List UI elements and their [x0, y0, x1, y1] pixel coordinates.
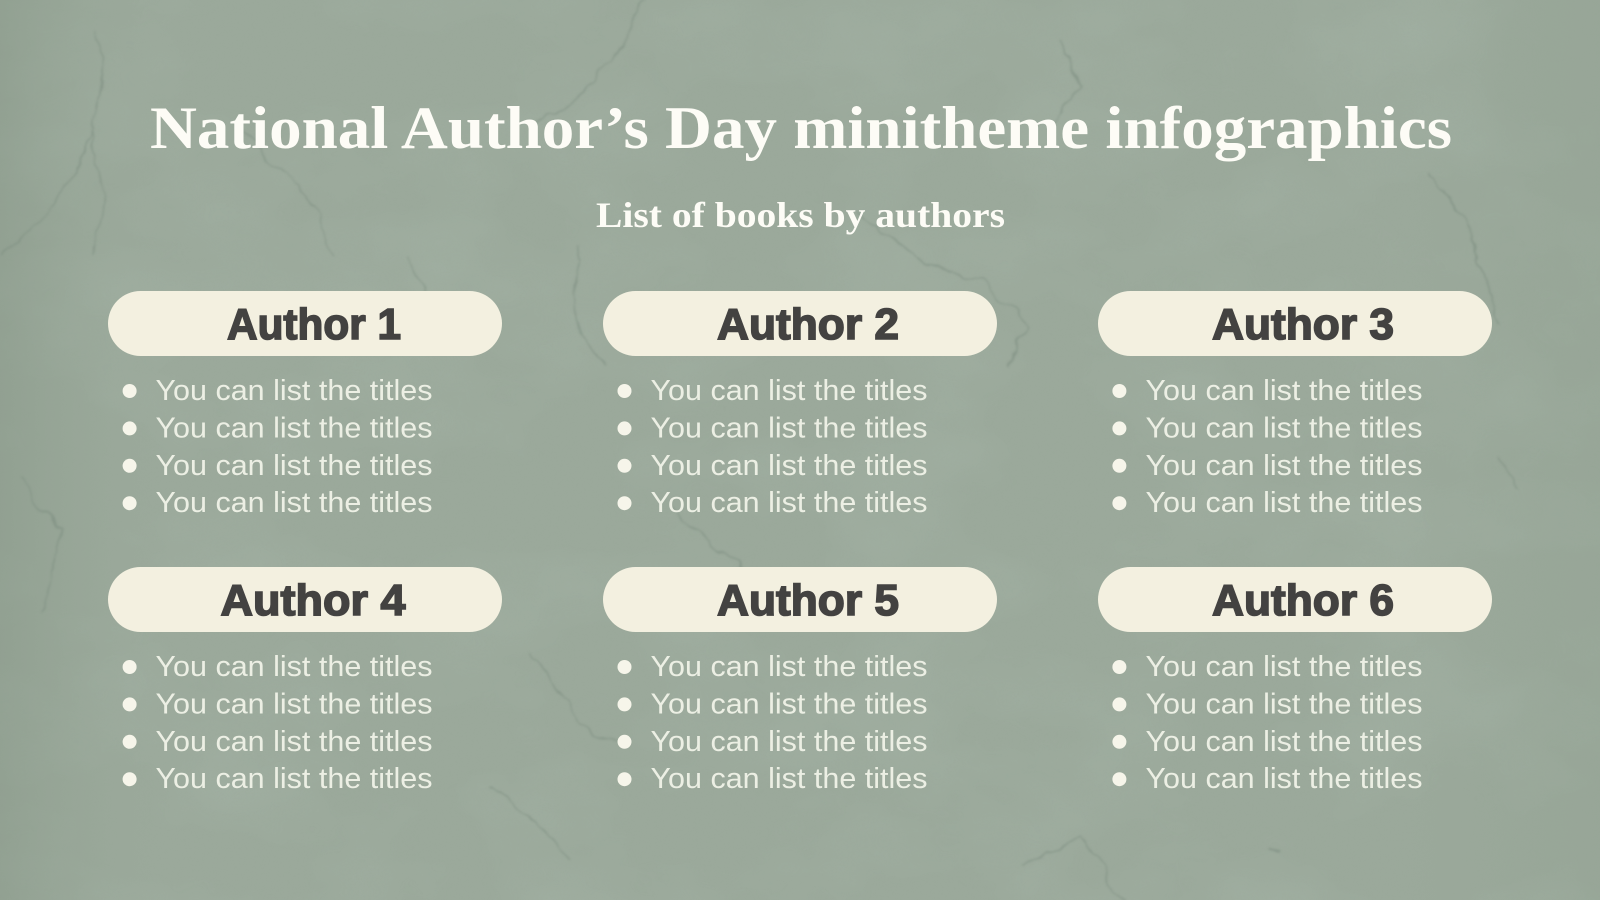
book title: You can list the titles: [156, 763, 432, 795]
book title: You can list the titles: [650, 450, 928, 482]
book title: You can list the titles: [156, 726, 432, 758]
author 2 name: Author 2: [717, 300, 899, 349]
author 5 book list: [618, 651, 928, 795]
book title: You can list the titles: [1146, 450, 1422, 482]
panel: author 2: [603, 291, 997, 519]
book title: You can list the titles: [156, 651, 432, 683]
author 6 book list: [1112, 651, 1422, 795]
book title: You can list the titles: [1146, 763, 1422, 795]
author 1 name: Author 1: [227, 300, 401, 349]
book title: You can list the titles: [156, 375, 432, 407]
author 2 book list: [618, 375, 928, 519]
book title: You can list the titles: [156, 450, 432, 482]
author 3 name: Author 3: [1212, 300, 1394, 349]
panel: author 6: [1098, 567, 1492, 795]
book title: You can list the titles: [1146, 726, 1422, 758]
author 4 name: Author 4: [220, 576, 406, 625]
title: National Author’s Day minitheme infographics: [150, 95, 1452, 161]
panel: author 3: [1098, 291, 1492, 519]
book title: You can list the titles: [650, 375, 928, 407]
book title: You can list the titles: [650, 688, 928, 720]
book title: You can list the titles: [156, 688, 432, 720]
book title: You can list the titles: [1146, 487, 1422, 519]
book title: You can list the titles: [650, 763, 928, 795]
panel: author 1: [108, 291, 502, 519]
author 1 badge: [108, 291, 502, 356]
panel: author 5: [603, 567, 997, 795]
book title: You can list the titles: [650, 726, 928, 758]
book title: You can list the titles: [1146, 412, 1422, 444]
book title: You can list the titles: [156, 412, 432, 444]
author 2 badge: [603, 291, 997, 356]
author 5 name: Author 5: [717, 576, 899, 625]
author 3 badge: [1098, 291, 1492, 356]
book title: You can list the titles: [650, 487, 928, 519]
book title: You can list the titles: [650, 412, 928, 444]
book title: You can list the titles: [1146, 375, 1422, 407]
panel: author 4: [108, 567, 502, 795]
author 4 book list: [123, 651, 432, 795]
subtitle: List of books by authors: [596, 195, 1005, 235]
author 4 badge: [108, 567, 502, 632]
author 5 badge: [603, 567, 997, 632]
author 3 book list: [1112, 375, 1422, 519]
author 6 badge: [1098, 567, 1492, 632]
book title: You can list the titles: [156, 487, 432, 519]
author 6 name: Author 6: [1212, 576, 1394, 625]
book title: You can list the titles: [1146, 688, 1422, 720]
book title: You can list the titles: [650, 651, 928, 683]
book title: You can list the titles: [1146, 651, 1422, 683]
author 1 book list: [123, 375, 432, 519]
